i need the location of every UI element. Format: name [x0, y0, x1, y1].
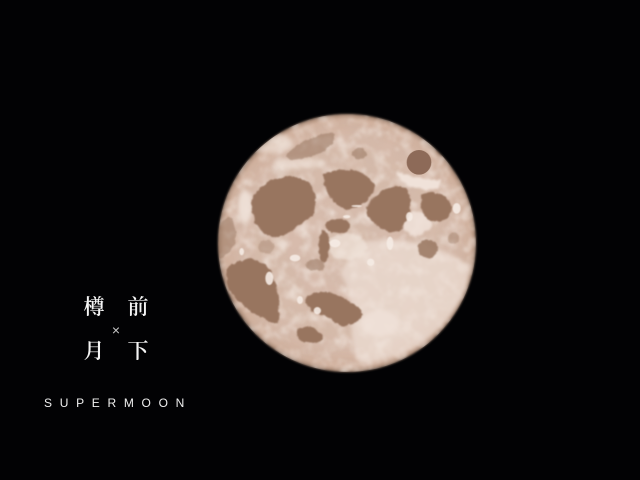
moon photograph: [216, 112, 478, 374]
crisium bright halo: [327, 172, 441, 260]
bright highlands: [238, 133, 470, 363]
title character: xia: 下: [128, 339, 148, 363]
subtitle: SUPERMOON: SUPERMOON: [44, 396, 192, 410]
mare crisium: [407, 150, 431, 175]
multiplication sign: ×: [112, 322, 120, 338]
bright ray craters: [239, 203, 461, 314]
title character: zun: 樽: [84, 295, 104, 319]
maria: [219, 133, 459, 343]
title character: qian: 前: [128, 295, 148, 319]
title character: yue: 月: [84, 339, 104, 363]
moon surface details: [218, 114, 476, 372]
moon disc: [218, 114, 476, 372]
dark surface mottling: [218, 114, 476, 372]
title text block: [44, 295, 192, 410]
light surface mottling: [218, 114, 476, 372]
